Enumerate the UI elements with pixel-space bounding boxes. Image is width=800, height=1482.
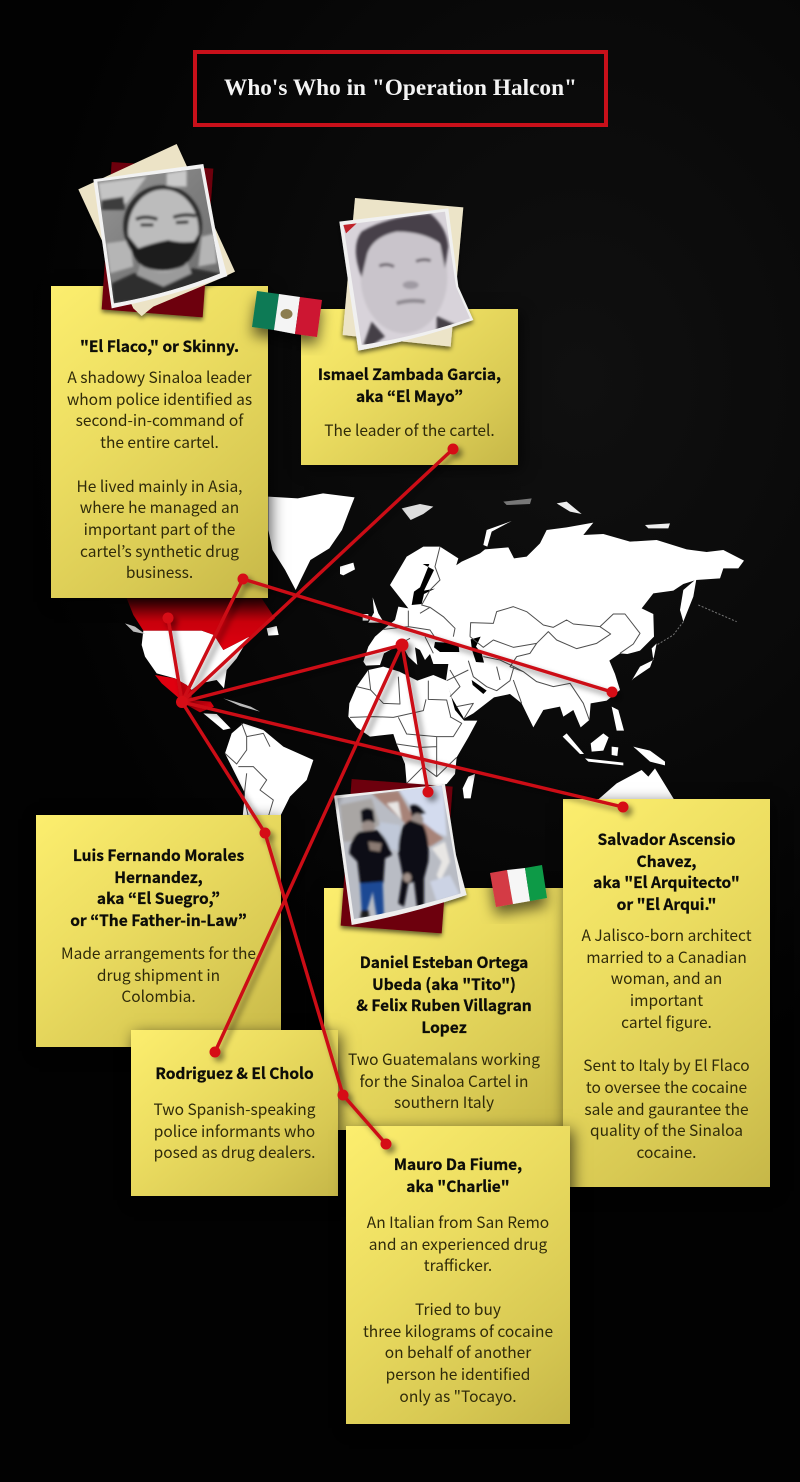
heading: El Mayo: Ismael Zambada Garcia, [318,363,501,385]
text: El Suegro description [61,942,256,1007]
text: Rodriguez and El Cholo description: Two Spanish-speaking [154,1098,315,1120]
text: El Arquitecto description: sale and gaurantee the [584,1098,749,1120]
heading: Tito and Villagran: Daniel Esteban Ortega [360,951,528,973]
card: Salvador Ascensio Chavez [563,799,770,1187]
heading: El Suegro [70,844,247,931]
photo: El Flaco [78,144,235,317]
text: El Flaco description: the entire cartel. [100,431,219,453]
card: Rodriguez and El Cholo [131,1030,338,1196]
text: Mauro Da Fiume description: An Italian from San Remo [367,1211,549,1233]
heading: Mauro Da Fiume [394,1153,522,1197]
heading: El Suegro: Hernandez, [114,866,203,888]
text: El Arquitecto description: to oversee the cocaine [586,1076,747,1098]
text: Tito and Villagran description: for the Sinaloa Cartel in [360,1070,528,1092]
text: El Flaco description: A shadowy Sinaloa leader [67,366,252,388]
card: El Flaco [51,286,268,598]
text: El Flaco description: He lived mainly in Asia, [76,475,242,497]
text: El Flaco description: important part of the [84,518,235,540]
title: Who's Who in "Operation Halcon" [224,75,577,101]
text: Mauro Da Fiume description: person he identified [386,1363,530,1385]
heading: El Suegro: aka “El Suegro,” [97,887,220,909]
heading: El Arquitecto: Salvador Ascensio [597,828,736,850]
photos and flags [78,144,556,939]
text: El Arquitecto description: quality of the Sinaloa [590,1119,743,1141]
text: Mauro Da Fiume description: only as "Tocayo. [399,1385,517,1407]
text: Mauro Da Fiume description: trafficker. [424,1254,492,1276]
text: El Arquitecto description: cartel figure. [621,1011,712,1033]
text: Rodriguez and El Cholo description: posed as drug dealers. [154,1141,315,1163]
text: El Arquitecto description: married to a Canadian [586,946,747,968]
text: El Arquitecto description: Sent to Italy by El Flaco [583,1054,750,1076]
heading: Tito and Villagran: Lopez [421,1016,467,1038]
text: Rodriguez and El Cholo description: police informants who [154,1120,315,1142]
heading: El Arquitecto [593,828,740,915]
heading: El Arquitecto: or "El Arqui." [617,893,716,915]
text: El Flaco description: business. [126,561,193,583]
text: El Arquitecto description: cocaine. [636,1141,696,1163]
text: Tito and Villagran description: Two Guatemalans working [348,1048,540,1070]
text: El Arquitecto description: A Jalisco-born architect [581,924,752,946]
heading: Tito and Villagran: & Felix Ruben Villagran [356,994,532,1016]
text: El Suegro description: Made arrangements for the [61,942,256,964]
text: Tito and Villagran description: southern Italy [394,1091,494,1113]
text: Mauro Da Fiume description: and an experienced drug [369,1233,547,1255]
card: Mauro Da Fiume [346,1126,570,1424]
heading: El Mayo [318,363,501,407]
flag: Mexico [252,291,322,337]
text: El Arquitecto description [581,924,752,1163]
text: El Flaco description: where he managed an [80,496,239,518]
heading: El Suegro: Luis Fernando Morales [73,844,244,866]
heading: El Arquitecto: Chavez, [637,850,696,872]
text: Mauro Da Fiume description: Tried to buy [415,1298,501,1320]
text: El Arquitecto description: important [630,989,703,1011]
heading: Tito and Villagran [356,951,532,1038]
text: El Flaco description [67,366,252,583]
title [193,50,608,127]
text: Mauro Da Fiume description: on behalf of another [385,1341,531,1363]
photo: El Mayo [339,198,473,351]
text: El Flaco description: second-in-command of [76,409,243,431]
heading: Rodriguez and El Cholo: Rodriguez & El Cholo [155,1062,314,1084]
heading: El Mayo: aka “El Mayo” [356,385,463,407]
flag: Italy [490,865,547,907]
text: El Suegro description: Colombia. [121,985,196,1007]
text: El Suegro description: drug shipment in [97,964,220,986]
text: El Mayo description: The leader of the cartel. [324,419,495,441]
heading: El Arquitecto: aka "El Arquitecto" [593,871,740,893]
card: Luis Fernando Morales Hernandez [36,815,281,1047]
text: Rodriguez and El Cholo description [154,1098,316,1163]
heading: El Suegro: or “The Father-in-Law” [70,909,247,931]
photo: Tito and Villagran [333,779,467,933]
text: El Arquitecto description: woman, and an [611,967,722,989]
card: Daniel Esteban Ortega Ubeda and Felix Ruben Villagran Lopez [324,888,564,1130]
heading: El Flaco: "El Flaco," or Skinny. [80,335,239,357]
heading: Mauro Da Fiume: aka "Charlie" [406,1175,510,1197]
text: El Flaco description: whom police identified as [67,388,252,410]
text: Mauro Da Fiume description [363,1211,553,1407]
text: Mauro Da Fiume description: three kilograms of cocaine [363,1320,553,1342]
heading: Tito and Villagran: Ubeda (aka "Tito") [372,973,516,995]
heading: Mauro Da Fiume: Mauro Da Fiume, [394,1153,522,1175]
card: El Mayo [301,309,518,465]
text: Tito and Villagran description [348,1048,540,1113]
text: El Flaco description: cartel’s synthetic drug [80,540,239,562]
